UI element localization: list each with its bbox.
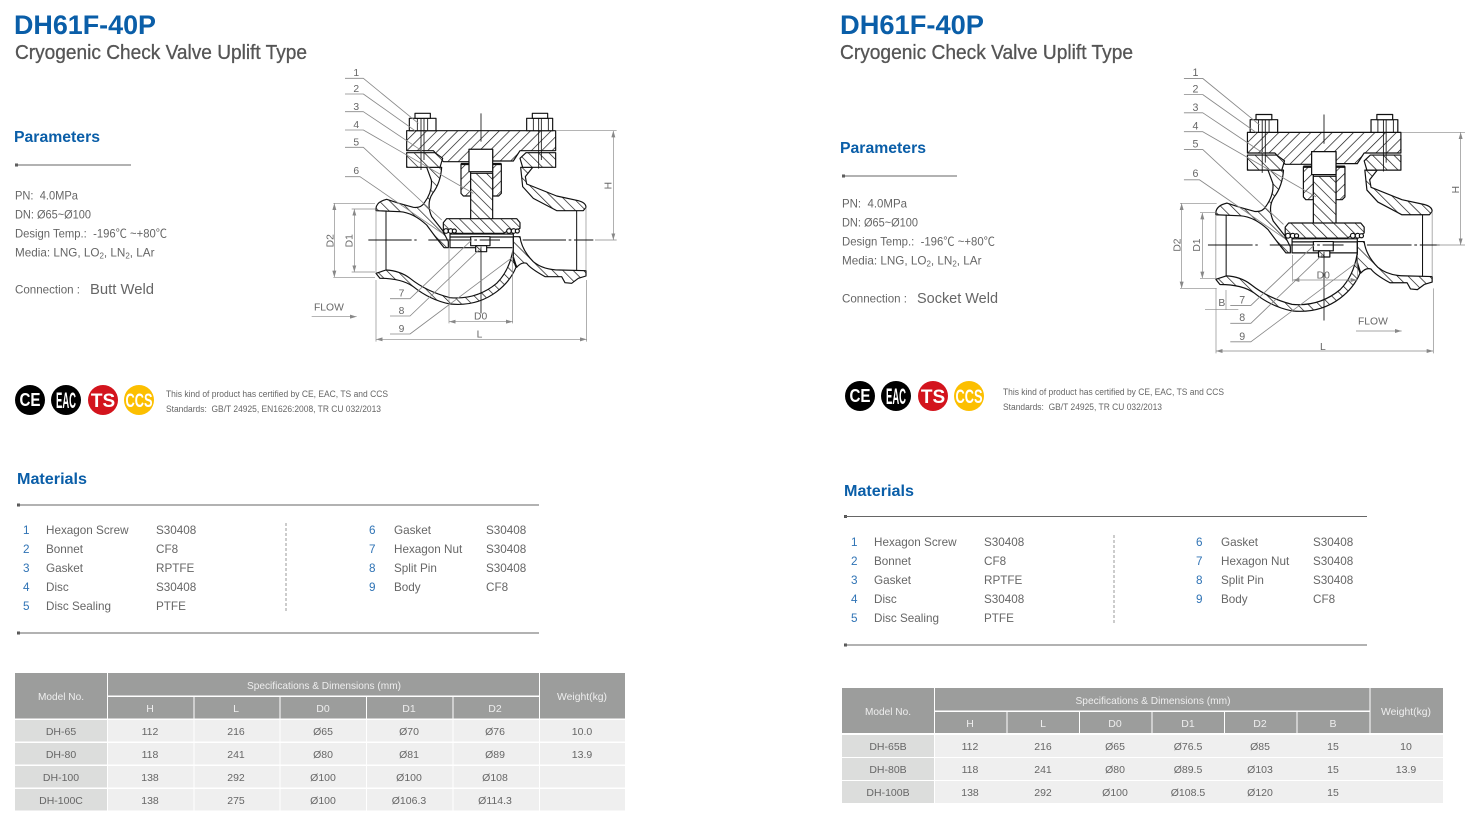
spec table right: DH-65B (869, 741, 907, 753)
materials list right: PTFE (984, 612, 1014, 625)
certification text right: This kind of product has certified by CE, EAC, TS and CCS (1003, 387, 1224, 397)
spec table left: Ø76 (485, 726, 505, 738)
materials list left: 6 (369, 524, 376, 537)
spec table left: H (146, 703, 154, 715)
materials list right: Split Pin (1221, 574, 1264, 587)
heading: right parameters: Parameters (840, 140, 926, 157)
dimension lines left: D0 (474, 311, 487, 322)
spec table right: Ø103 (1247, 764, 1273, 776)
dimension lines left: FLOW (314, 302, 344, 313)
materials list left: S30408 (486, 524, 526, 537)
spec table left: DH-100C (39, 795, 83, 807)
title: right product: DH61F-40P (840, 10, 984, 40)
materials list left: 7 (369, 543, 376, 556)
callout numbers right: 9 (1239, 331, 1245, 343)
parameter list left: Media: LNG, LO (15, 246, 99, 260)
spec table right: 15 (1327, 764, 1339, 776)
certification icons right: TS (921, 387, 945, 408)
spec table right: 112 (962, 741, 979, 753)
certification icons left: EAC (56, 388, 76, 413)
materials list right: Bonnet (874, 555, 912, 568)
certification icons left: TS (91, 391, 115, 412)
materials list left: 2 (23, 543, 30, 556)
parameter list left: , LAr (130, 246, 155, 260)
materials list left: CF8 (486, 581, 508, 594)
parameter list right: 2 (926, 260, 931, 268)
materials list left: S30408 (486, 543, 526, 556)
materials list left: S30408 (156, 524, 196, 537)
parameter list right (842, 198, 998, 307)
spec table right: Ø65 (1105, 741, 1125, 753)
materials list right: 1 (851, 536, 858, 549)
heading: right materials: Materials (844, 483, 914, 500)
parameter list left: 2 (99, 252, 104, 260)
spec table left: Weight(kg) (557, 691, 607, 703)
materials list left (17, 504, 539, 634)
spec table right: Ø100 (1102, 787, 1128, 799)
callout numbers right: 1 (1193, 67, 1199, 79)
callout numbers left (353, 68, 405, 335)
materials list left: Disc Sealing (46, 600, 111, 613)
materials list right: Disc (874, 593, 897, 606)
spec table left: 10.0 (572, 726, 592, 738)
materials list right: S30408 (984, 593, 1024, 606)
spec table left: 138 (141, 772, 159, 784)
materials list right: S30408 (984, 536, 1024, 549)
dimension lines left (312, 131, 617, 342)
spec table left: 13.9 (572, 749, 592, 761)
certification icons left: CCS (126, 391, 152, 412)
spec table left: D0 (316, 703, 330, 715)
parameter list left: Connection : (15, 284, 80, 296)
parameter list left: , LN (104, 246, 125, 260)
materials list left: RPTFE (156, 562, 195, 575)
spec table right: DH-80B (869, 764, 907, 776)
spec table right: Ø120 (1247, 787, 1273, 799)
callout numbers right: 7 (1239, 294, 1245, 306)
spec table right: Ø80 (1105, 764, 1125, 776)
materials list left: CF8 (156, 543, 178, 556)
callout numbers left: 3 (353, 102, 359, 113)
callout numbers left: 5 (353, 137, 359, 148)
spec table right: D0 (1108, 718, 1122, 730)
spec table right: B (1329, 718, 1337, 730)
parameter list left (15, 190, 167, 298)
callout numbers right: 8 (1239, 312, 1245, 324)
spec table left: Ø65 (313, 726, 333, 738)
spec table left: D1 (402, 703, 416, 715)
materials list left: Gasket (394, 524, 432, 537)
spec table left: Specifications & Dimensions (mm) (247, 680, 401, 692)
spec table right: 118 (962, 764, 979, 776)
spec table left: Ø106.3 (392, 795, 426, 807)
materials list left: Body (394, 581, 421, 594)
materials list left: Disc (46, 581, 69, 594)
dimension lines left: L (477, 329, 483, 340)
materials list left: 4 (23, 581, 30, 594)
valve drawing left (312, 68, 617, 342)
dimension lines right: D1 (1192, 238, 1203, 252)
spec table right: 241 (1034, 764, 1052, 776)
materials list right: 3 (851, 574, 858, 587)
spec table left: 138 (141, 795, 159, 807)
materials list right: Gasket (1221, 536, 1259, 549)
materials list right: S30408 (1313, 574, 1353, 587)
callout numbers left: 8 (399, 306, 405, 317)
callout numbers left: 7 (399, 289, 405, 300)
spec table right: 15 (1327, 787, 1339, 799)
materials list right: CF8 (984, 555, 1006, 568)
materials list left: 5 (23, 600, 30, 613)
callout numbers left: 6 (353, 166, 359, 177)
spec table right: Model No. (865, 706, 911, 718)
materials list right: 4 (851, 593, 858, 606)
parameter list left: 2 (125, 252, 130, 260)
heading: left parameters: Parameters (14, 129, 100, 146)
spec table left: 118 (142, 749, 159, 761)
materials list left: 8 (369, 562, 376, 575)
materials list right: RPTFE (984, 574, 1023, 587)
spec table left: Ø108 (482, 772, 508, 784)
spec table left: Ø70 (399, 726, 419, 738)
spec table right (842, 688, 1443, 803)
certification text left: This kind of product has certified by CE, EAC, TS and CCS (166, 389, 388, 399)
callout numbers right: 2 (1193, 84, 1199, 96)
parameter list right: Socket Weld (917, 290, 998, 307)
spec table left: 275 (227, 795, 245, 807)
materials list right: Hexagon Screw (874, 536, 957, 549)
subtitle: right product: Cryogenic Check Valve Uplift Type (840, 42, 1133, 64)
callout numbers right: 3 (1193, 102, 1199, 114)
spec table left: DH-65 (46, 726, 76, 738)
parameter list left: PN: 4.0MPa (15, 190, 78, 202)
spec table right: D2 (1253, 718, 1267, 730)
callout numbers right: 5 (1193, 138, 1199, 150)
parameter list left: Design Temp.: -196℃ ~+80℃ (15, 228, 167, 240)
parameters rule right (842, 174, 957, 178)
spec table left: Ø80 (313, 749, 333, 761)
materials list right: 6 (1196, 536, 1203, 549)
valve drawing right (1173, 67, 1465, 353)
certification icons right: CE (850, 386, 870, 406)
callout numbers left: 2 (353, 84, 359, 95)
spec table right: Ø76.5 (1174, 741, 1202, 753)
callout numbers left: 9 (399, 324, 405, 335)
dimension lines right (1173, 132, 1465, 353)
certification icons left (15, 385, 154, 415)
spec table left (15, 673, 625, 811)
callout numbers right (1193, 67, 1245, 343)
parameter list right: Connection : (842, 292, 907, 306)
materials list right: 8 (1196, 574, 1203, 587)
certification text left: Standards: GB/T 24925, EN1626:2008, TR CU 032/2013 (166, 404, 381, 414)
spec table right: DH-100B (866, 787, 910, 799)
spec table right: Ø85 (1250, 741, 1270, 753)
materials list right: Disc Sealing (874, 612, 939, 625)
dimension lines left: H (604, 182, 615, 189)
certification text left (166, 389, 388, 414)
spec table left: 241 (227, 749, 245, 761)
spec table right: 15 (1327, 741, 1339, 753)
materials list right: 9 (1196, 593, 1203, 606)
callout numbers left: 4 (353, 120, 359, 131)
certification text right: Standards: GB/T 24925, TR CU 032/2013 (1003, 402, 1162, 412)
subtitle: left product: Cryogenic Check Valve Uplift Type (15, 42, 307, 64)
dimension lines right: B (1218, 298, 1225, 309)
materials list left: Hexagon Nut (394, 543, 463, 556)
spec table right: D1 (1181, 718, 1195, 730)
dimension lines right: L (1320, 342, 1326, 353)
certification text right (1003, 387, 1224, 412)
spec table left: Ø81 (399, 749, 419, 761)
spec table left: Ø100 (310, 795, 336, 807)
spec table left: 292 (227, 772, 245, 784)
spec table left: D2 (488, 703, 502, 715)
materials list right: 7 (1196, 555, 1203, 568)
materials list right (844, 515, 1367, 646)
parameter list right: Design Temp.: -196℃ ~+80℃ (842, 236, 995, 248)
spec table right: Ø89.5 (1174, 764, 1202, 776)
dimension lines right: FLOW (1358, 317, 1388, 328)
materials list left: 9 (369, 581, 376, 594)
certification icons right (845, 381, 984, 411)
materials list left: S30408 (156, 581, 196, 594)
materials list left: Gasket (46, 562, 84, 575)
materials list right: 5 (851, 612, 858, 625)
spec table right: L (1040, 718, 1046, 730)
materials list right: CF8 (1313, 593, 1335, 606)
dimension lines right: H (1451, 186, 1462, 193)
certification icons right: EAC (886, 384, 906, 409)
materials list left: Split Pin (394, 562, 437, 575)
dimension lines right: D0 (1317, 271, 1330, 282)
callout numbers right: 4 (1193, 121, 1199, 133)
materials list right: 2 (851, 555, 858, 568)
spec table right: 292 (1034, 787, 1052, 799)
heading: left materials: Materials (17, 471, 87, 488)
dimension lines left: D1 (345, 234, 356, 247)
materials list right: Body (1221, 593, 1248, 606)
spec table right: Specifications & Dimensions (mm) (1076, 695, 1230, 707)
spec table right: 216 (1034, 741, 1052, 753)
parameter list right: , LN (931, 254, 952, 268)
spec table left: Ø114.3 (478, 795, 512, 807)
spec table left: Model No. (38, 691, 84, 703)
parameter list right: 2 (952, 260, 957, 268)
materials list right: S30408 (1313, 536, 1353, 549)
materials list left: S30408 (486, 562, 526, 575)
spec table left: Ø100 (396, 772, 422, 784)
parameter list left: DN: Ø65~Ø100 (15, 208, 91, 222)
parameter list left: Butt Weld (90, 281, 154, 298)
spec table left: DH-80 (46, 749, 76, 761)
materials list right: Hexagon Nut (1221, 555, 1290, 568)
materials list left: Bonnet (46, 543, 84, 556)
parameter list right: Media: LNG, LO (842, 254, 926, 268)
spec table left: Ø89 (485, 749, 505, 761)
parameters rule left (15, 164, 131, 166)
spec table left: 112 (142, 726, 159, 738)
spec table right: Ø108.5 (1171, 787, 1205, 799)
spec table right: 10 (1400, 741, 1412, 753)
spec table right: 13.9 (1396, 764, 1416, 776)
spec table left: 216 (227, 726, 245, 738)
parameter list right: , LAr (957, 254, 982, 268)
materials list left: 1 (23, 524, 30, 537)
callout numbers left: 1 (353, 68, 359, 79)
spec table right: 138 (961, 787, 979, 799)
materials list right: Gasket (874, 574, 912, 587)
title: left product: DH61F-40P (14, 10, 156, 40)
dimension lines left: D2 (325, 234, 336, 247)
spec table right: H (966, 718, 974, 730)
certification icons left: CE (20, 390, 40, 410)
parameter list right: PN: 4.0MPa (842, 198, 907, 210)
spec table left: Ø100 (310, 772, 336, 784)
materials list left: PTFE (156, 600, 186, 613)
callout numbers right: 6 (1193, 168, 1199, 180)
spec table left: L (233, 703, 239, 715)
parameter list right: DN: Ø65~Ø100 (842, 216, 918, 230)
materials list right: S30408 (1313, 555, 1353, 568)
materials list left: 3 (23, 562, 30, 575)
certification icons right: CCS (956, 387, 982, 408)
spec table left: DH-100 (43, 772, 79, 784)
materials list left: Hexagon Screw (46, 524, 129, 537)
dimension lines right: D2 (1173, 238, 1184, 252)
spec table right: Weight(kg) (1381, 706, 1431, 718)
